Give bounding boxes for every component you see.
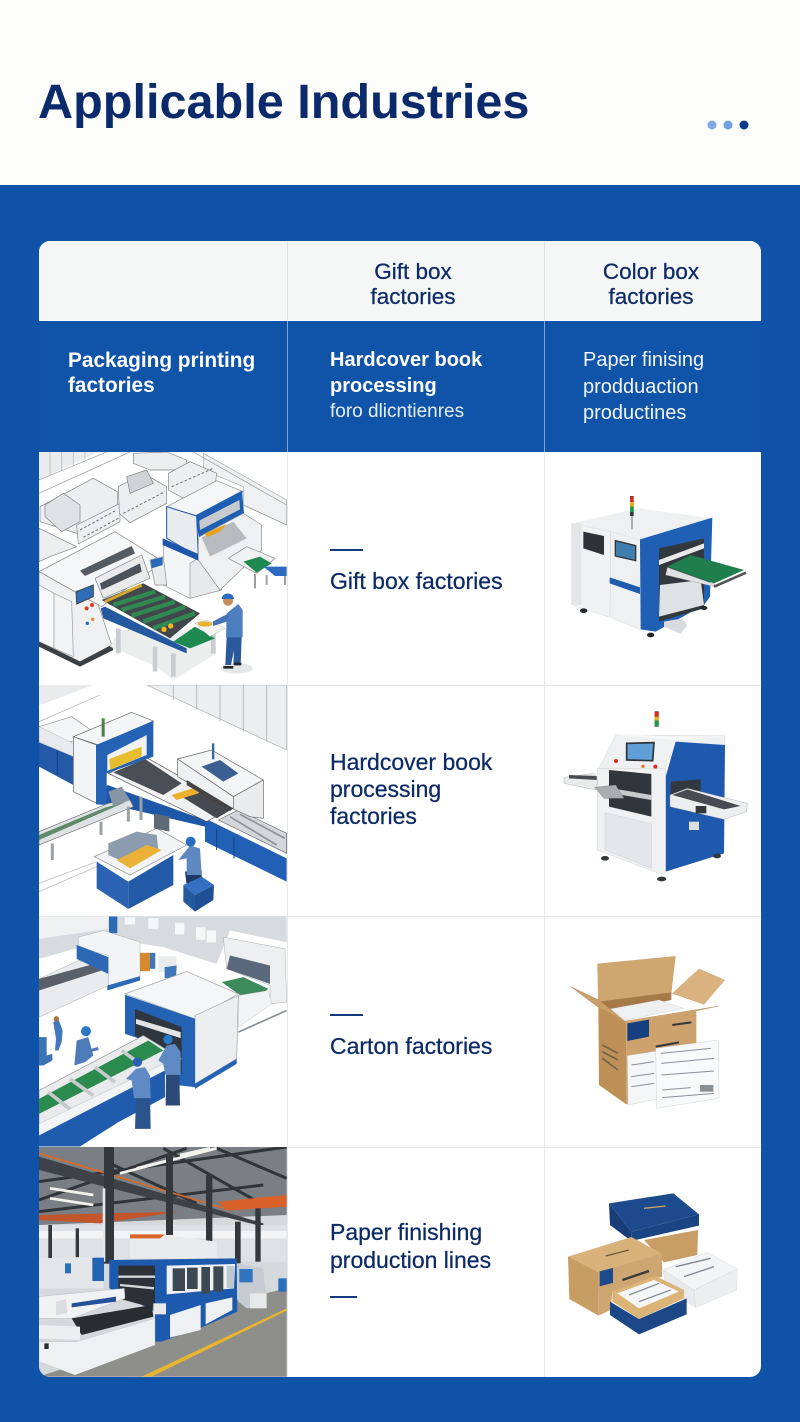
floor xyxy=(39,1288,287,1377)
dash xyxy=(330,1296,357,1298)
blue category row xyxy=(39,321,761,452)
category: hardcover book: Hardcover book xyxy=(330,349,482,371)
grid lines xyxy=(287,241,288,320)
far right machine xyxy=(223,937,287,1004)
illustration: carton factory floor xyxy=(39,916,287,1146)
second machine xyxy=(163,540,203,598)
category note: foro dlicntienres xyxy=(330,401,464,422)
illustration: packaging printing factory xyxy=(39,452,287,680)
front machine xyxy=(39,1288,125,1318)
label: Carton factories xyxy=(330,1033,492,1059)
central machine xyxy=(109,1258,237,1342)
feed conveyor xyxy=(39,800,133,845)
comparison table card xyxy=(39,241,761,1377)
illustration: hardcover line xyxy=(39,685,287,912)
column heading: gift box: Gift box xyxy=(374,259,452,284)
product: machine with green conveyor xyxy=(571,496,746,638)
column heading: gift box: factories xyxy=(370,284,456,309)
category: paper finishing: productines xyxy=(583,402,686,424)
row 4 text: paper finishing xyxy=(330,1219,491,1298)
central machine xyxy=(125,972,238,1019)
row 2 text: hardcover xyxy=(330,749,493,829)
pagination dots xyxy=(708,120,748,130)
photo: paper finishing production line xyxy=(39,1147,287,1377)
column heading: gift box xyxy=(370,259,456,309)
worker and stool xyxy=(185,870,202,885)
header row xyxy=(39,241,761,320)
label: Paper finishing xyxy=(330,1219,482,1245)
second machine xyxy=(178,750,263,797)
product: stack of boxes xyxy=(568,1193,738,1334)
label: processing xyxy=(330,776,441,802)
header band xyxy=(0,0,800,185)
workers xyxy=(158,1035,181,1106)
label: factories xyxy=(330,803,417,829)
dash xyxy=(330,549,363,551)
label: Gift box factories xyxy=(330,568,503,594)
category: paper finishing: Paper finising xyxy=(583,349,704,371)
column heading: color box: factories xyxy=(608,284,694,309)
label xyxy=(330,749,493,829)
conveyor xyxy=(110,630,217,680)
conveyor xyxy=(39,1036,182,1129)
far left machine xyxy=(39,960,108,1017)
background machines xyxy=(39,1257,103,1288)
product: machine with pass-through conveyor xyxy=(564,711,748,882)
label: production lines xyxy=(330,1247,491,1273)
column heading: color box: Color box xyxy=(603,259,699,284)
title: Applicable Industries xyxy=(38,75,529,129)
worker xyxy=(213,594,253,674)
main printer xyxy=(39,532,163,607)
tunnel machine xyxy=(73,712,153,745)
category: paper finishing xyxy=(583,349,704,424)
category: packaging printing: Packaging printing xyxy=(68,349,255,372)
category: paper finishing: prodduaction xyxy=(583,376,699,398)
label: Hardcover book xyxy=(330,749,492,775)
category: hardcover book xyxy=(330,349,482,397)
dash xyxy=(330,1014,363,1016)
category: packaging printing xyxy=(68,349,255,397)
product: open carton with documents xyxy=(570,956,725,1108)
label xyxy=(330,1219,491,1274)
category: packaging printing: factories xyxy=(68,374,155,397)
long blue base xyxy=(98,785,205,827)
category: hardcover book: processing xyxy=(330,375,437,397)
column heading: color box xyxy=(603,259,700,309)
table xyxy=(94,828,187,875)
